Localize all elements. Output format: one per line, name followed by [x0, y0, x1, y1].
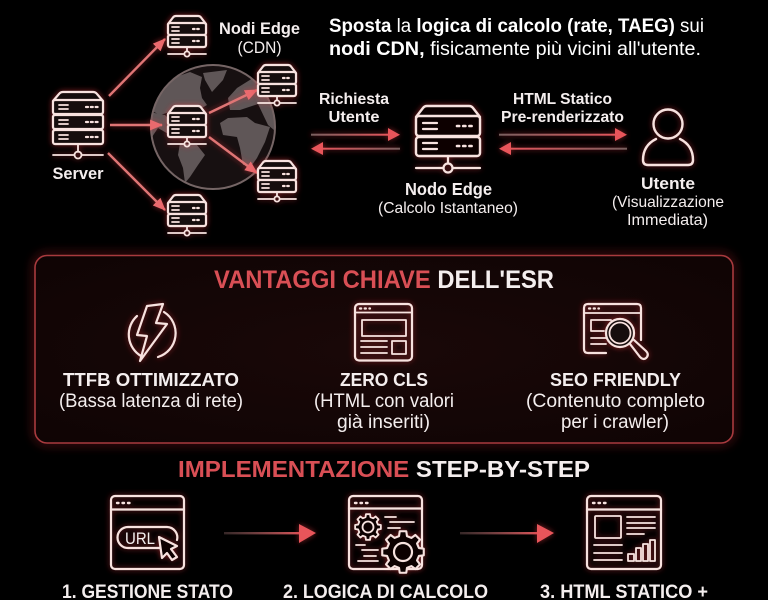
benefit: SEO friendly: per i crawler): [561, 412, 669, 433]
benefit: Zero CLS: già inseriti): [337, 412, 430, 433]
request flow: user request to edge node: [311, 91, 724, 229]
icon: browser with URL and cursor: URL: [125, 529, 155, 548]
icon: browser with gears: [349, 496, 424, 573]
benefit: SEO friendly: SEO FRIENDLY: [550, 369, 682, 390]
label: HTML Statico Pre-renderizzato: [501, 91, 624, 126]
label: Richiesta Utente: [319, 91, 389, 126]
icon: page layout: [355, 304, 412, 360]
icon: browser with URL and cursor: [111, 496, 184, 569]
benefit: TTFB: TTFB OTTIMIZZATO: [63, 369, 239, 390]
label: Nodo Edge: Nodo Edge: [405, 179, 492, 199]
benefit: TTFB: (Bassa latenza di rete): [59, 391, 243, 412]
section heading: implementazione: IMPLEMENTAZIONE STEP-BY-STEP: [178, 456, 590, 482]
panel heading: VANTAGGI CHIAVE DELL'ESR: [214, 266, 554, 294]
label: Utente: Immediata): [627, 212, 708, 229]
arrows: response pair: [499, 128, 627, 155]
benefit: Zero CLS: (HTML con valori: [314, 391, 454, 412]
label: HTML Statico Pre-renderizzato: Pre-renderizzato: [501, 109, 624, 126]
globe: [150, 65, 280, 189]
label: Nodi Edge: [219, 19, 300, 57]
icon: edge node lower right: [258, 161, 296, 202]
icon: magnifier over page: [584, 304, 648, 359]
panel: vantaggi chiave: [35, 255, 733, 443]
icon: edge node upper right: [258, 65, 296, 106]
arrows from origin server and central node: [108, 39, 257, 210]
icon: lightning bolt: [129, 304, 176, 361]
benefit: Zero CLS: ZERO CLS: [340, 369, 428, 390]
icon: user: [643, 110, 693, 165]
step 2: logica di calcolo: [283, 496, 488, 600]
label: Utente: [612, 174, 724, 229]
label: Utente: Utente: [641, 174, 695, 193]
network diagram: server to CDN edge nodes: [52, 16, 300, 236]
label: Utente: (Visualizzazione: [612, 194, 724, 211]
icon: edge node centre: [168, 106, 206, 147]
intro statement: Sposta la logica di calcolo (rate, TAEG) sui: [329, 16, 704, 37]
icon: edge node top: [168, 16, 206, 57]
benefit: Zero CLS: [314, 304, 454, 433]
icon: static page with chart: [587, 496, 661, 569]
label: Server: Server: [52, 165, 104, 183]
intro statement: [329, 16, 704, 60]
connector lines from central node: [186, 57, 188, 191]
label: HTML Statico Pre-renderizzato: HTML Statico: [513, 91, 612, 108]
icon: origin server: [53, 92, 103, 158]
benefit: TTFB: [59, 304, 243, 412]
label: Richiesta Utente: Richiesta: [319, 91, 389, 108]
icon: Nodo Edge server: [416, 106, 480, 172]
intro statement: nodi CDN, fisicamente più vicini all'utente.: [329, 38, 701, 60]
label: Nodi Edge: Nodi Edge: [219, 19, 300, 38]
label: Nodi Edge: (CDN): [238, 39, 282, 57]
benefit: SEO friendly: (Contenuto completo: [526, 391, 705, 412]
benefit: SEO friendly: [526, 304, 705, 433]
icon: edge node bottom: [168, 195, 206, 236]
arrow: step 1 to step 2: [224, 524, 316, 543]
arrow: step 2 to step 3: [460, 524, 554, 543]
label: Nodo Edge: [378, 179, 518, 217]
label: Richiesta Utente: Utente: [328, 109, 380, 126]
arrows: request pair: [311, 128, 400, 155]
step 1: gestione stato: [62, 496, 233, 600]
label: Nodo Edge: (Calcolo Istantaneo): [378, 200, 518, 217]
step 3: html statico: [540, 496, 708, 600]
